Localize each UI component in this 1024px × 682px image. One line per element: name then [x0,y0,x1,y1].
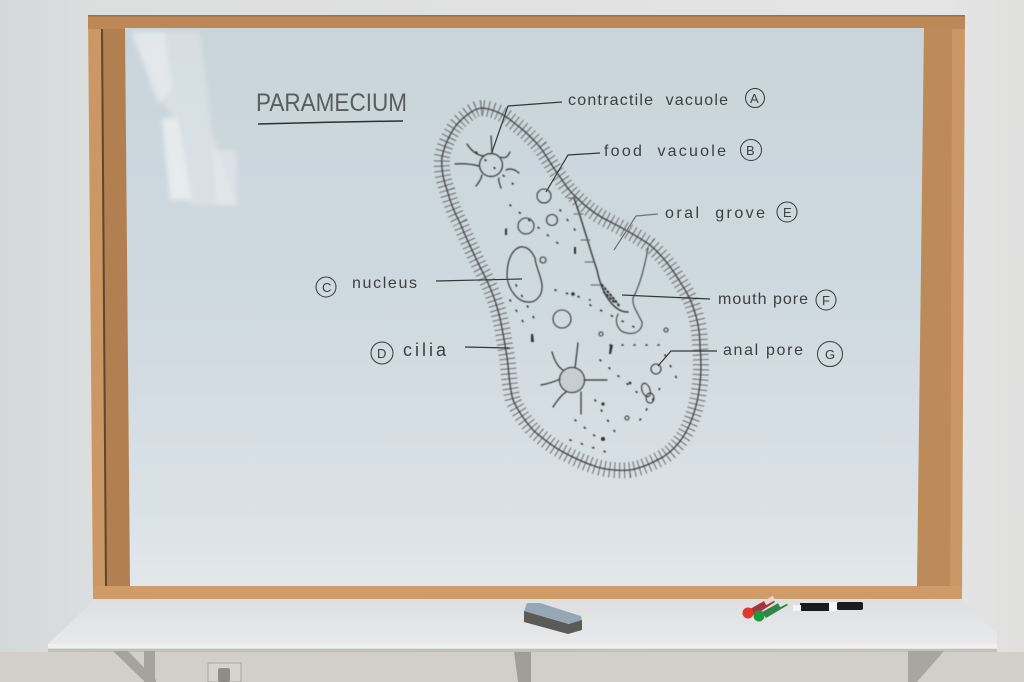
cilia [442,108,701,470]
label: nucleus C [316,275,417,297]
cork strip: right [917,28,952,586]
label: mouth pore F [718,290,836,310]
label: oral grove E: E [783,205,792,220]
glare on board [130,32,238,205]
shelf brackets [113,651,156,682]
label: mouth pore F: mouth pore [718,291,808,308]
label: anal pore G: G [825,347,835,362]
label: contractile vacuole A: contractile vacuole [568,92,728,109]
vacuole lower [541,343,607,414]
body outline [442,108,701,470]
whiteboard frame [88,15,965,599]
leader lines [436,102,717,366]
label: food vacuole B [604,140,762,160]
label: contractile vacuole A [568,88,764,109]
title: PARAMECIUM [256,89,407,117]
nucleus [507,247,542,302]
label: oral grove E: oral grove [665,205,765,222]
eraser [524,603,582,634]
label: mouth pore F: F [822,293,830,308]
label: cilia D [371,340,447,364]
label: food vacuole B: food vacuole [604,143,726,160]
power outlet [208,663,241,682]
label: anal pore G: anal pore [723,342,803,359]
writing surface [125,28,924,586]
marker: black [793,602,863,611]
label: nucleus C: C [322,280,331,295]
granules [476,152,680,455]
label: anal pore G [723,342,842,366]
vacuole upper [455,136,519,188]
oral groove [568,198,648,333]
label: oral grove E [665,202,797,222]
labels [316,88,842,366]
wall shelf [48,600,997,682]
label: cilia D: D [377,346,386,361]
marker: red [742,597,775,618]
food vacuoles [518,189,668,420]
label: food vacuole B: B [746,143,755,158]
label: nucleus C: nucleus [352,275,417,292]
paramecium diagram [442,108,701,470]
label: cilia D: cilia [403,340,447,360]
marker: green [754,600,788,622]
label: contractile vacuole A: A [750,91,759,106]
